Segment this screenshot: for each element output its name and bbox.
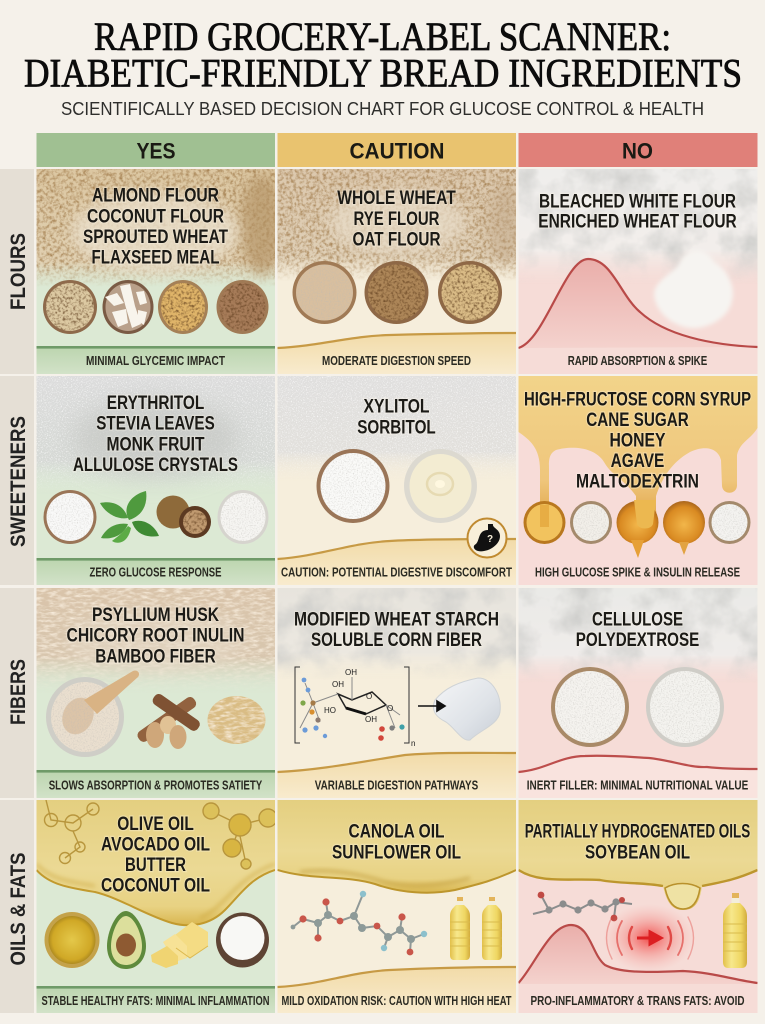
bowl: psyllium husk with spoon [46, 670, 139, 757]
bowl: almond flour [43, 280, 97, 334]
title: RAPID GROCERY-LABEL SCANNER: [94, 14, 671, 59]
items: SORBITOL [357, 417, 436, 438]
items [576, 609, 699, 651]
row label: oils and fats: OILS & FATS [7, 852, 30, 966]
items: MONK FRUIT [106, 434, 205, 455]
items [524, 390, 751, 492]
items [357, 398, 436, 435]
row label: flours: FLOURS [7, 233, 30, 310]
title [24, 14, 742, 96]
bowl: oats [438, 261, 502, 324]
arrow [418, 701, 445, 711]
items [83, 186, 228, 268]
items: MODIFIED WHEAT STARCH [294, 609, 499, 630]
row label: sweeteners: SWEETENERS [7, 416, 30, 547]
bowl: allulose [218, 490, 268, 544]
molecule diagram [291, 891, 427, 955]
digestion curve [278, 333, 516, 374]
icon: monk fruit [156, 496, 211, 538]
items: STEVIA LEAVES [96, 414, 215, 435]
items [525, 822, 750, 863]
panel: sweeteners no [518, 376, 758, 585]
digestion curve [278, 539, 516, 585]
row label: sweeteners [0, 376, 34, 585]
bowl: rye [364, 261, 428, 324]
bowl: xylitol [316, 449, 390, 523]
items: RYE FLOUR [354, 209, 440, 230]
chemical structure diagram: HO [324, 706, 336, 715]
bowl: cellulose [551, 667, 629, 747]
note: MODERATE DIGESTION SPEED [322, 354, 471, 368]
row label: flours [0, 169, 34, 374]
items: WHOLE WHEAT [337, 188, 456, 209]
note: STABLE HEALTHY FATS: MINIMAL INFLAMMATION [42, 994, 270, 1008]
icon: butter [151, 922, 208, 968]
bowl: olive oil [44, 912, 100, 968]
bowl: corn syrup [524, 501, 566, 544]
oil pool [36, 800, 275, 925]
note: CAUTION: POTENTIAL DIGESTIVE DISCOMFORT [281, 566, 512, 580]
items [294, 609, 499, 651]
items: OLIVE OIL [117, 814, 194, 835]
bowl: flaxseed meal [216, 280, 268, 334]
chemical structure diagram: n [411, 739, 415, 748]
icon: stevia leaves [100, 491, 159, 543]
chemical structure diagram: O [387, 704, 393, 713]
items: XYLITOL [364, 396, 430, 417]
items: MALTODEXTRIN [576, 471, 699, 492]
items: BUTTER [125, 855, 186, 876]
items: AGAVE [611, 451, 664, 472]
chemical structure diagram [295, 667, 415, 748]
items [66, 605, 244, 667]
icon: starch crystal [433, 678, 500, 740]
glucose curve [518, 756, 758, 798]
digestion curve [278, 967, 516, 1013]
chemical structure diagram: OH [365, 715, 377, 724]
items: CANE SUGAR [586, 410, 689, 431]
molecule diagram [533, 892, 632, 921]
icon: oil bottle [482, 897, 502, 960]
column header: no [518, 133, 758, 167]
bowl: coconut oil [216, 912, 269, 968]
items: PSYLLIUM HUSK [92, 605, 219, 626]
icon: avocado [107, 911, 146, 969]
note: SLOWS ABSORPTION & PROMOTES SATIETY [49, 778, 263, 792]
row label: fibers [0, 588, 34, 798]
impact bar [36, 986, 275, 1013]
impact bar [36, 558, 275, 585]
items [332, 822, 461, 863]
molecule decoration [44, 800, 277, 869]
items: BAMBOO FIBER [95, 646, 216, 667]
items [337, 188, 456, 251]
panel: fibers yes [36, 588, 275, 798]
items: CELLULOSE [592, 609, 683, 630]
items: ERYTHRITOL [107, 393, 205, 414]
bowl: agave [663, 501, 705, 555]
column header: caution [278, 133, 516, 167]
icon: chicory root [136, 692, 202, 749]
bowl: whole wheat [292, 261, 356, 324]
panel: sweeteners yes [36, 376, 275, 585]
items: FLAXSEED MEAL [92, 247, 220, 268]
glucose spike curve [518, 259, 758, 348]
items: AVOCADO OIL [101, 835, 210, 856]
panel: sweeteners caution [278, 376, 516, 585]
chemical structure diagram: OH [332, 680, 344, 689]
bowl: cane sugar [570, 501, 612, 544]
icon: red inflammation pulse [603, 904, 695, 972]
bowl: polydextrose [646, 667, 724, 747]
panel: oils caution [278, 800, 516, 1013]
digestion curve [278, 753, 516, 798]
flour pile [654, 250, 733, 328]
items: ALMOND FLOUR [92, 186, 219, 207]
impact bar [36, 770, 275, 798]
items: OAT FLOUR [352, 230, 441, 251]
items: HONEY [610, 430, 666, 451]
column header: caution: CAUTION [350, 138, 444, 164]
row label: oils and fats [0, 800, 34, 1013]
icon: stomach warning [468, 518, 506, 558]
panel: flours yes [36, 169, 284, 374]
icon: oil bottle [450, 897, 470, 960]
bowl: erythritol [44, 490, 96, 544]
items [538, 193, 736, 228]
items: COCONUT OIL [101, 876, 210, 897]
icon: bamboo fiber pile [208, 696, 266, 744]
inflammation curve [518, 925, 758, 984]
row label: fibers: FIBERS [7, 659, 30, 725]
items: SUNFLOWER OIL [332, 842, 461, 863]
note: MINIMAL GLYCEMIC IMPACT [86, 354, 225, 368]
note: VARIABLE DIGESTION PATHWAYS [315, 778, 478, 792]
items: SPROUTED WHEAT [83, 227, 228, 248]
panel: oils yes [36, 800, 277, 1013]
items: COCONUT FLOUR [87, 206, 224, 227]
oil pool [278, 800, 516, 893]
panel: oils no [518, 800, 758, 1013]
chemical structure diagram: OH [345, 668, 357, 677]
items: POLYDEXTROSE [576, 630, 699, 651]
panel: flours caution [278, 169, 523, 374]
panel: fibers no [518, 588, 758, 798]
bowl: maltodextrin [708, 501, 750, 544]
chemical structure diagram: O [366, 692, 372, 701]
items: SOYBEAN OIL [585, 842, 690, 863]
bowl: honey [616, 500, 658, 558]
note: MILD OXIDATION RISK: CAUTION WITH HIGH HEAT [282, 994, 512, 1008]
honey drips [518, 376, 758, 524]
bowl: sprouted wheat [158, 280, 208, 334]
oil pool with droplet [518, 800, 758, 910]
items [101, 814, 210, 897]
panel: fibers caution [278, 588, 516, 798]
bowl: coconut flakes [102, 280, 154, 334]
column header: yes: YES [136, 138, 176, 164]
note: ZERO GLUCOSE RESPONSE [90, 566, 222, 580]
column header: no: NO [622, 138, 653, 164]
column header: yes [36, 133, 275, 167]
icon: stomach warning: ? [487, 534, 493, 545]
panel: flours no [518, 169, 758, 374]
items: SOLUBLE CORN FIBER [311, 630, 482, 651]
items: CANOLA OIL [348, 822, 445, 843]
bowl: sorbitol syrup [404, 449, 477, 523]
impact bar [36, 346, 275, 374]
subtitle: SCIENTIFICALLY BASED DECISION CHART FOR GLUCOSE CONTROL & HEALTH [61, 98, 704, 119]
items [73, 393, 238, 476]
items: CHICORY ROOT INULIN [66, 626, 244, 647]
items: ALLULOSE CRYSTALS [73, 455, 238, 476]
note: RAPID ABSORPTION & SPIKE [568, 354, 707, 368]
icon: oil bottle [723, 893, 747, 968]
